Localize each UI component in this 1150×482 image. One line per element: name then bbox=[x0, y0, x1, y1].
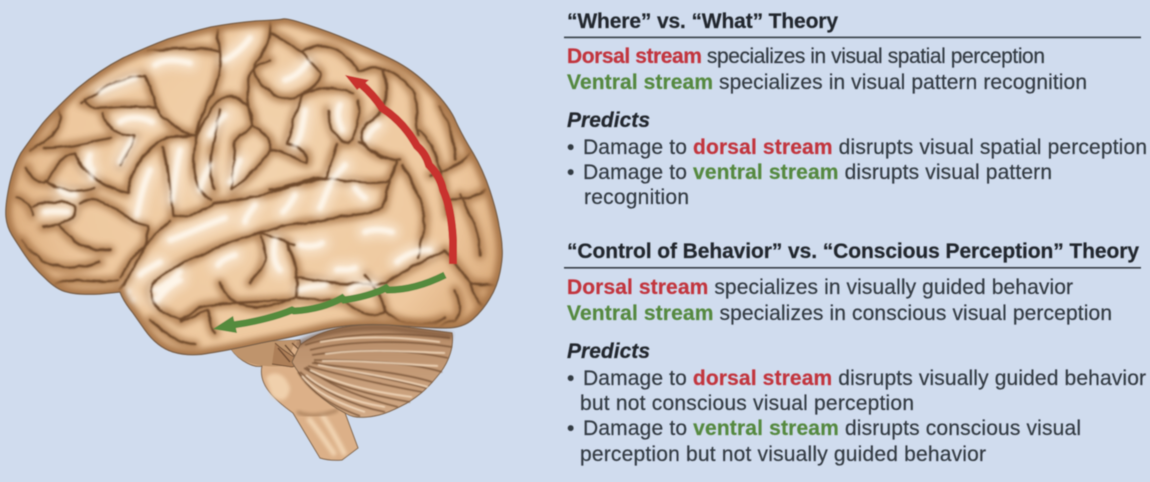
bullet: ventral damage: recognition bbox=[584, 186, 689, 209]
bullet: dorsal damage bbox=[567, 367, 1146, 415]
bullet: dorsal damage: • bbox=[567, 136, 574, 159]
bullet: dorsal damage: Damage to dorsal stream disrupts visual spatial perception bbox=[583, 136, 1147, 159]
brainstem and medulla bbox=[231, 340, 358, 460]
bullet: ventral damage: Damage to ventral stream disrupts visual pattern bbox=[583, 161, 1052, 184]
text column bbox=[564, 10, 1147, 466]
definition: dorsal stream: Dorsal stream specializes in visually guided behavior bbox=[567, 276, 1073, 299]
panel: where vs what theory bbox=[564, 10, 1147, 209]
cerebellum bbox=[292, 325, 452, 417]
bullet: ventral damage: • bbox=[567, 161, 574, 184]
cerebrum bbox=[0, 0, 510, 360]
bullet: ventral damage: perception but not visually guided behavior bbox=[580, 443, 986, 466]
bullet: ventral damage: Damage to ventral stream disrupts conscious visual bbox=[583, 417, 1081, 440]
subheading: predicts: Predicts bbox=[567, 340, 650, 363]
definition: ventral stream: Ventral stream specializes in conscious visual perception bbox=[567, 302, 1112, 325]
arrow: dorsal stream (red) bbox=[345, 75, 453, 264]
heading: control vs perception: “Control of Behavior” vs. “Conscious Perception” Theory bbox=[567, 240, 1139, 263]
bullet: dorsal damage: • bbox=[567, 367, 574, 390]
bullet: ventral damage bbox=[567, 417, 1081, 466]
panel: control of behavior vs conscious perception theory bbox=[564, 240, 1146, 466]
bullet: dorsal damage: Damage to dorsal stream disrupts visually guided behavior bbox=[583, 367, 1146, 390]
subheading: predicts: Predicts bbox=[567, 109, 650, 132]
bullet: dorsal damage: but not conscious visual perception bbox=[580, 392, 914, 415]
definition: ventral stream: Ventral stream specializes in visual pattern recognition bbox=[567, 71, 1087, 94]
bullet: ventral damage: • bbox=[567, 417, 574, 440]
heading: where vs what: “Where” vs. “What” Theory bbox=[567, 10, 838, 33]
definition: dorsal stream: Dorsal stream specializes in visual spatial perception bbox=[567, 45, 1045, 68]
bullet: ventral damage bbox=[567, 161, 1052, 209]
brain illustration bbox=[0, 0, 510, 460]
arrow: ventral stream (green) bbox=[213, 275, 445, 333]
